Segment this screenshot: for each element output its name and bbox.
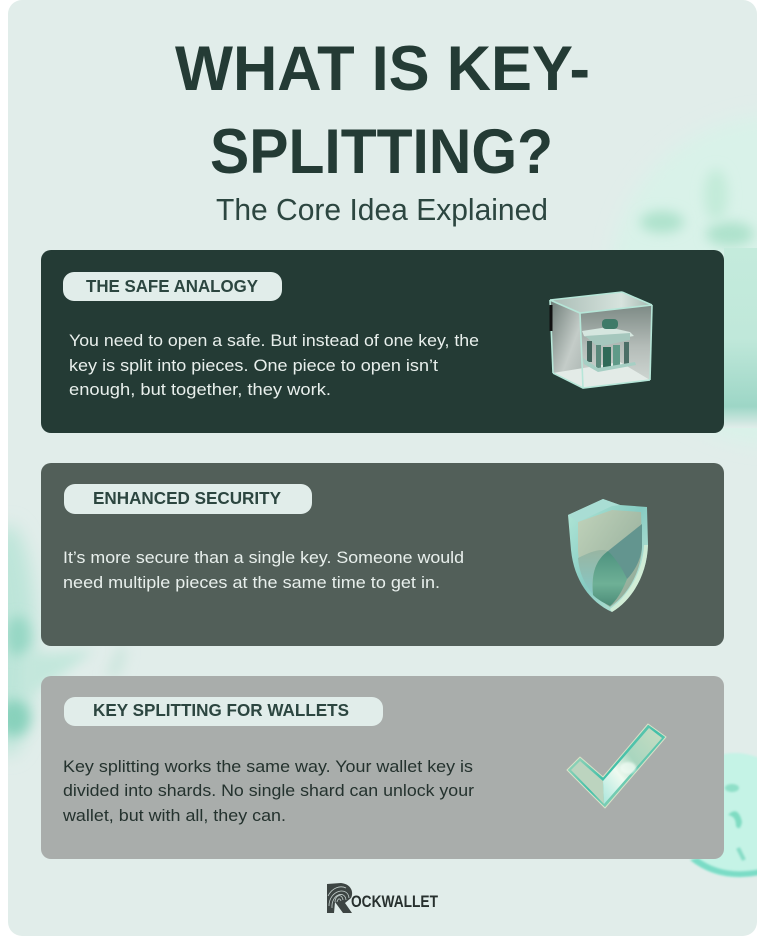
heading pill: key splitting for wallets: KEY SPLITTING FOR WALLETS xyxy=(93,700,349,720)
icon: glass cube with bank xyxy=(550,292,652,388)
decorative coin bottom right xyxy=(690,752,757,878)
heading pill: enhanced security: ENHANCED SECURITY xyxy=(93,488,281,508)
panel: key splitting for wallets xyxy=(41,676,724,859)
text: key splitting body xyxy=(62,757,474,825)
icon: fingerprint R xyxy=(327,883,352,913)
text: key splitting body: Key splitting works the same way. Your wallet key is xyxy=(63,757,473,776)
title: SPLITTING? xyxy=(210,117,553,187)
logo: Rockwallet: OCKWALLET xyxy=(351,893,438,911)
heading pill: enhanced security xyxy=(64,484,312,514)
text: safe analogy body xyxy=(69,331,479,399)
text: enhanced security body: It’s more secure than a single key. Someone would xyxy=(63,548,464,567)
icon: glass check mark xyxy=(567,724,666,808)
text: key splitting body: wallet, but with all, they can. xyxy=(62,806,286,825)
subtitle: The Core Idea Explained xyxy=(216,192,548,227)
heading pill: the safe analogy: THE SAFE ANALOGY xyxy=(86,276,258,296)
panel: the safe analogy xyxy=(41,250,724,433)
text: safe analogy body: You need to open a safe. But instead of one key, the xyxy=(69,331,479,350)
logo: Rockwallet xyxy=(327,883,438,913)
decorative blurred coin left xyxy=(0,525,128,755)
text: enhanced security body xyxy=(63,548,464,592)
text: safe analogy body: enough, but together, they work. xyxy=(69,380,331,399)
heading pill: the safe analogy xyxy=(63,272,282,301)
decorative blurred coin top right xyxy=(630,156,757,426)
text: enhanced security body: need multiple pieces at the same time to get in. xyxy=(63,573,440,592)
title xyxy=(175,34,590,187)
title: WHAT IS KEY- xyxy=(175,34,590,104)
text: key splitting body: divided into shards. No single shard can unlock your xyxy=(63,781,474,800)
text: safe analogy body: key is split into pieces. One piece to open isn’t xyxy=(69,356,438,375)
icon: glass shield xyxy=(568,499,648,612)
panel: enhanced security xyxy=(41,463,724,646)
heading pill: key splitting for wallets xyxy=(64,697,383,726)
